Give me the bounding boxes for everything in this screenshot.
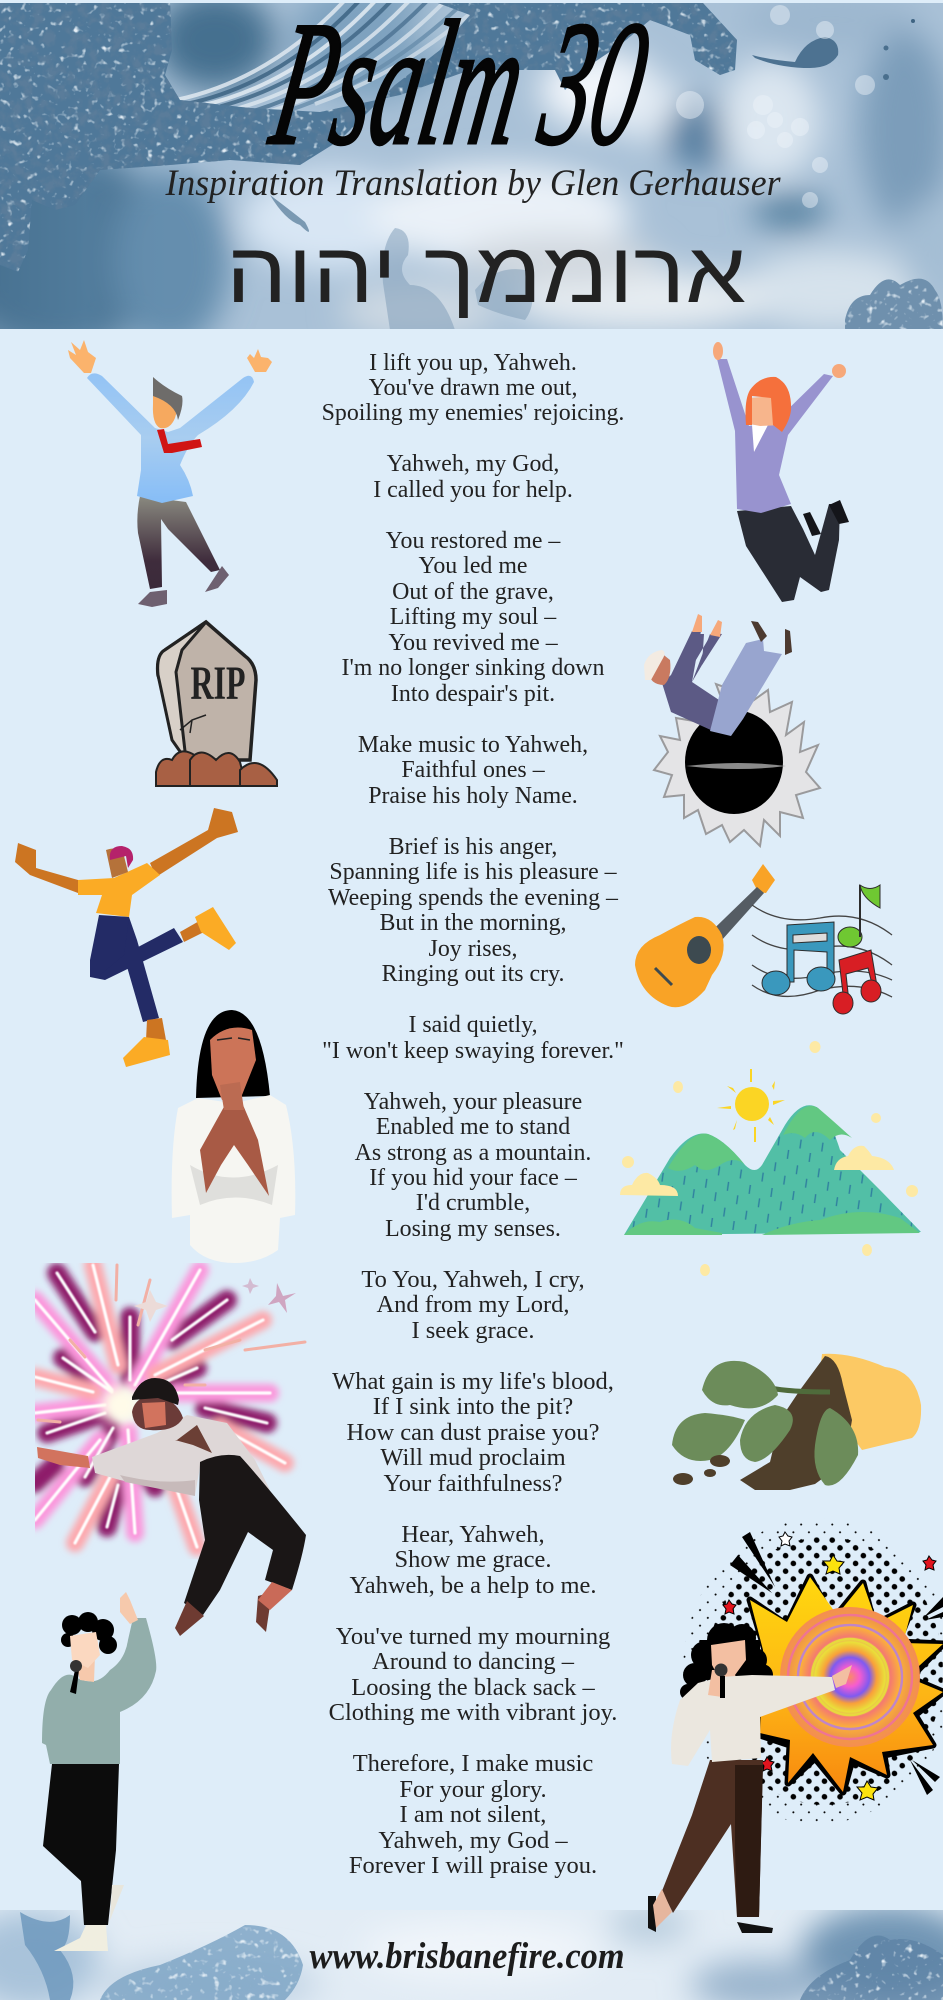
firework sparkle stars [134, 1278, 296, 1322]
figure: left singer in sage sweater [42, 1592, 156, 1951]
burst shadow [750, 1577, 943, 1792]
burst star [750, 1577, 943, 1792]
icon: RIP tombstone [156, 622, 277, 786]
panel: pink firework burst [35, 1265, 305, 1547]
figure: jumping woman in purple [713, 342, 849, 602]
figure: jumping man in blue shirt [68, 340, 272, 607]
heading: Hebrew title: ארוממך יהוה [226, 225, 746, 321]
firework centre [101, 1385, 141, 1425]
firework wide glows [35, 1265, 285, 1547]
ripples band [176, 0, 486, 112]
figure: man falling into torn hole [644, 614, 820, 846]
clouds [620, 1173, 678, 1196]
panel: water splash header [0, 0, 943, 350]
icon: guitar [635, 864, 775, 1007]
firework white cores [35, 1265, 285, 1547]
RIP lettering: RIP [190, 657, 246, 710]
footer website address: www.brisbanefire.com [310, 1936, 624, 1977]
falling body [662, 631, 722, 731]
figure: right singer in cream sweater [648, 1623, 852, 1933]
text block: psalm poem [322, 350, 624, 1879]
torn paper hole [654, 676, 820, 846]
subtitle: Inspiration Translation by Glen Gerhauser [165, 163, 781, 204]
dots [622, 1041, 918, 1276]
panel: water splash footer [0, 1905, 943, 2000]
dirt mound [156, 751, 277, 786]
sun [717, 1069, 785, 1142]
figure: spilled plant pot [672, 1354, 921, 1490]
panel: comic burst with halftone [683, 1518, 943, 1824]
text block: psalm poem: To You, Yahweh, I cry, And from my Lord, I seek grace. What gain is my life's blood, If I sink into the pit? How can dust praise you? Will mud proclaim Your faithfulness? Hear, Yahweh, Show me grace. Yahweh, be a help to me. You've turned my mourning Around to dancing – Loosing the black sack – Clothing me with vibrant joy. Therefore, I make music For your glory. I am not silent, Yahweh, my God – Forever I will praise you. [329, 1267, 617, 1879]
halftone dots [683, 1518, 943, 1824]
icon: mountains with sun and clouds [620, 1041, 921, 1276]
green note [838, 885, 880, 947]
swirl [780, 1607, 920, 1747]
action spikes [730, 1532, 943, 1795]
lower left smooth water [0, 167, 144, 329]
figure: flying woman with hat [37, 1378, 306, 1636]
blue beamed notes [762, 922, 835, 995]
text block: psalm poem: I lift you up, Yahweh. You've drawn me out, Spoiling my enemies' rejoicing. Yahweh, my God, I called you for help. You restored me – You led me Out of the grave, Lifting my soul – You revived me – I'm no longer sinking down Into despair's pit. Make music to Yahweh, Faithful ones – Praise his holy Name. Brief is his anger, Spanning life is his pleasure – Weeping spends the evening – But in the morning, Joy rises, Ringing out its cry. I said quietly, "I won't keep swaying forever." Yahweh, your pleasure Enabled me to stand As strong as a mountain. If you hid your face – I'd crumble, Losing my senses. [322, 350, 624, 1242]
red notes [833, 950, 881, 1014]
droplets and water chains [270, 5, 943, 330]
figure: dancing man in orange shirt [15, 808, 238, 1067]
splash ridge texture [0, 0, 737, 272]
icon: music notes [752, 885, 892, 1014]
figure: praying woman [172, 1010, 295, 1263]
small stars [723, 1532, 936, 1800]
